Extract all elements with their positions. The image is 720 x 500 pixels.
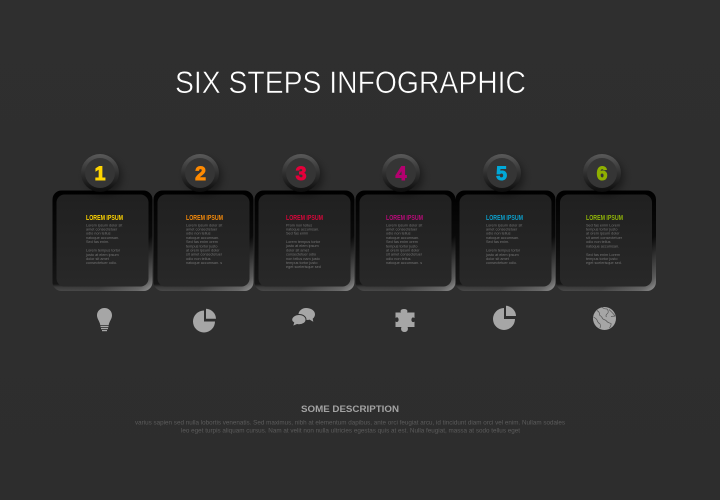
- text block 4: odio non tellus: [386, 232, 411, 236]
- text block 4: Lorem ipsum dolor sit: [386, 223, 423, 227]
- text block 3: tempus tortor justo: [286, 261, 317, 265]
- step 3: [254, 154, 354, 291]
- text block 2: odio non tellus: [186, 232, 211, 236]
- text block 4: natoque accumsan. s: [386, 261, 422, 265]
- text block 4: [386, 213, 423, 265]
- text block 1: amet consectetuer: [86, 228, 118, 232]
- footer description: varius sapien sed nulla lobortis venenatis. Sed maximus, nibh at elementum dapibus, ante orci feugiat arcu, id tincidunt diam orci vel enim. Nullam sodales: [135, 420, 566, 426]
- card 5: [456, 190, 556, 291]
- text block 3: natoque accumsan.: [286, 228, 319, 232]
- text block 3: LOREM IPSUM: [286, 213, 323, 222]
- text block 3: Proin non tellus: [286, 223, 312, 227]
- text block 6: eget scelerisque sed.: [586, 261, 622, 265]
- footer description: leo eget turpis aliquam cursus. Nam at velit non nulla ultricies egestas quis at est. Nulla feugiat, massa at sodo tellus eget: [181, 428, 520, 434]
- text block 5: odio non tellus: [486, 232, 511, 236]
- text block 5: amet consectetuer: [486, 228, 518, 232]
- text block 5: [485, 213, 523, 265]
- text block 1: Lorem ipsum dolor sit: [86, 223, 123, 227]
- text block 3: Lorem tempus tortor: [286, 240, 321, 244]
- step 2: [154, 154, 254, 291]
- badge 3: 3: [296, 163, 307, 185]
- text block 5: Lorem ipsum dolor sit: [486, 223, 523, 227]
- icon: speech bubbles: [292, 308, 315, 326]
- text block 1: Lorem tempus tortor: [86, 249, 121, 253]
- text block 5: justo at elem ipsum: [485, 253, 519, 257]
- card 1: [52, 190, 152, 291]
- text block 4: tempus tortor justo: [386, 244, 417, 248]
- text block 1: [85, 213, 123, 265]
- text block 2: tempus tortor justo: [186, 244, 217, 248]
- icon: pie chart: [193, 309, 216, 332]
- icon: globe: [593, 307, 616, 330]
- text block 3: [285, 213, 323, 269]
- card 3: [254, 190, 354, 291]
- text block 1: Sed fas enim.: [86, 240, 109, 244]
- badge 1: 1: [95, 163, 106, 185]
- badge 5: 5: [496, 163, 507, 185]
- footer heading: SOME DESCRIPTION: [301, 404, 399, 415]
- title: SIX STEPS INFOGRAPHIC: [175, 64, 526, 100]
- step 1: [52, 154, 152, 291]
- text block 6: Sed fas enim Lorem: [586, 223, 620, 227]
- card 2: [154, 190, 254, 291]
- text block 5: Lorem tempus tortor: [486, 249, 521, 253]
- text block 5: LOREM IPSUM: [486, 213, 523, 222]
- text block 6: natoque accumsan.: [586, 244, 619, 248]
- text block 5: dolor sit amet: [486, 257, 510, 261]
- step 6: [556, 154, 656, 291]
- footer description: [135, 420, 566, 434]
- text block 1: odio non tellus: [86, 232, 111, 236]
- text block 2: odio non tellus: [186, 257, 211, 261]
- icon: light bulb: [97, 308, 112, 331]
- icon: puzzle piece: [396, 309, 414, 332]
- text block 1: natoque accumsan.: [86, 236, 119, 240]
- text block 1: dolor sit amet: [86, 257, 110, 261]
- text block 1: justo at elem ipsum: [85, 253, 119, 257]
- text block 3: consectetuer odio: [286, 253, 316, 257]
- text block 3: justo at elem ipsum: [285, 244, 319, 248]
- text block 2: [186, 213, 223, 265]
- text block 3: dolor sit amet: [286, 248, 310, 252]
- text block 2: natoque accumsan. s: [186, 261, 222, 265]
- text block 2: at orem ipsum dolor: [186, 248, 220, 252]
- text block 4: LOREM IPSUM: [386, 213, 423, 222]
- text block 6: odio non tellus: [586, 240, 611, 244]
- text block 6: [586, 213, 623, 265]
- text block 6: tempus tortor justo: [586, 228, 617, 232]
- text block 2: Lorem ipsum dolor sit: [186, 223, 223, 227]
- card 4: [356, 190, 456, 291]
- text block 6: at orem ipsum dolor: [586, 232, 620, 236]
- text block 4: Sed fas enim orem: [386, 240, 418, 244]
- text block 3: Sed fas enim: [286, 232, 308, 236]
- text block 2: natoque accumsan.: [186, 236, 219, 240]
- text block 4: at orem ipsum dolor: [386, 248, 420, 252]
- text block 5: consectetuer odio.: [486, 261, 517, 265]
- text block 5: natoque accumsan.: [486, 236, 519, 240]
- text block 6: LOREM IPSUM: [586, 213, 623, 222]
- step 4: [356, 154, 456, 291]
- badge 6: 6: [597, 163, 608, 185]
- text block 6: sit amet consectetuer: [586, 236, 623, 240]
- text block 2: amet consectetuer: [186, 228, 218, 232]
- text block 1: consectetuer odio.: [86, 261, 117, 265]
- text block 1: LOREM IPSUM: [86, 213, 123, 222]
- text block 2: Sed fas enim orem: [186, 240, 218, 244]
- text block 3: eget scelerisque sed: [286, 265, 321, 269]
- text block 6: tempus tortor justo: [586, 257, 617, 261]
- card 6: [556, 190, 656, 291]
- badge 2: 2: [195, 163, 206, 185]
- text block 4: amet consectetuer: [386, 228, 418, 232]
- text block 4: odio non tellus: [386, 257, 411, 261]
- text block 4: natoque accumsan.: [386, 236, 419, 240]
- text block 5: Sed fas enim.: [486, 240, 509, 244]
- text block 2: LOREM IPSUM: [186, 213, 223, 222]
- text block 4: sit amet consectetuer: [386, 253, 423, 257]
- text block 3: non tellus nam justo: [286, 257, 320, 261]
- text block 2: sit amet consectetuer: [186, 253, 223, 257]
- badge 4: 4: [396, 163, 407, 185]
- step 5: [456, 154, 556, 291]
- icon: pie chart 2: [493, 306, 516, 330]
- text block 6: Sed fas enim Lorem: [586, 253, 620, 257]
